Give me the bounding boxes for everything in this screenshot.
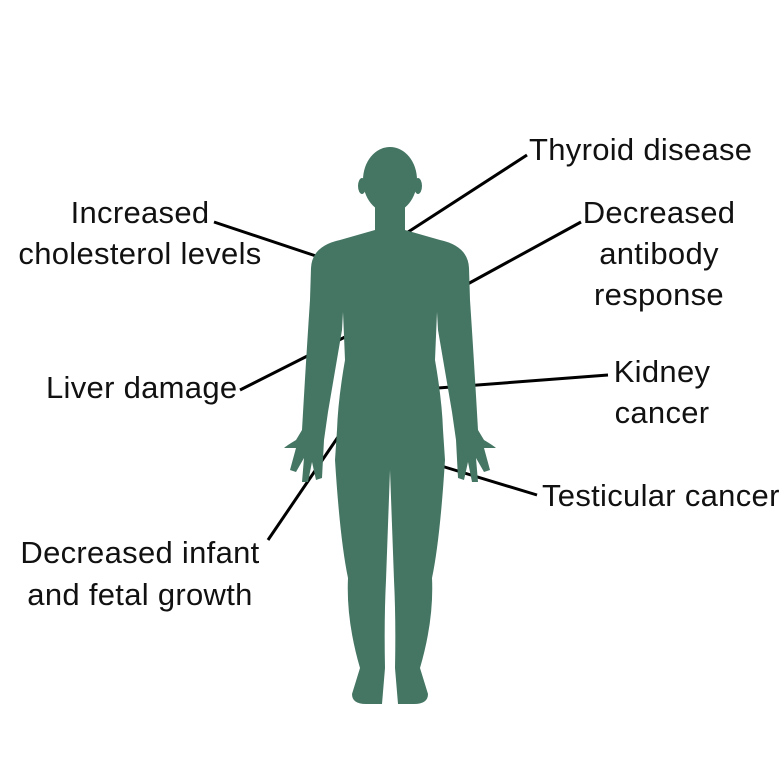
label: decreased antibody response: response: [594, 277, 724, 312]
label: increased cholesterol levels: cholesterol levels: [18, 236, 262, 271]
label: kidney cancer: cancer: [615, 395, 709, 430]
human body silhouette: [284, 147, 496, 704]
connector lines: [214, 155, 608, 540]
label: testicular cancer: Testicular cancer: [542, 478, 780, 513]
label: increased cholesterol levels: Increased: [71, 195, 209, 230]
label: liver damage: Liver damage: [46, 370, 237, 405]
label: decreased infant and fetal growth: and fetal growth: [27, 577, 253, 612]
label: decreased antibody response: Decreased: [583, 195, 735, 230]
label: kidney cancer: Kidney: [614, 354, 710, 389]
label: decreased antibody response: antibody: [599, 236, 719, 271]
label: decreased infant and fetal growth: Decreased infant: [20, 535, 260, 570]
label: thyroid disease: Thyroid disease: [529, 132, 752, 167]
